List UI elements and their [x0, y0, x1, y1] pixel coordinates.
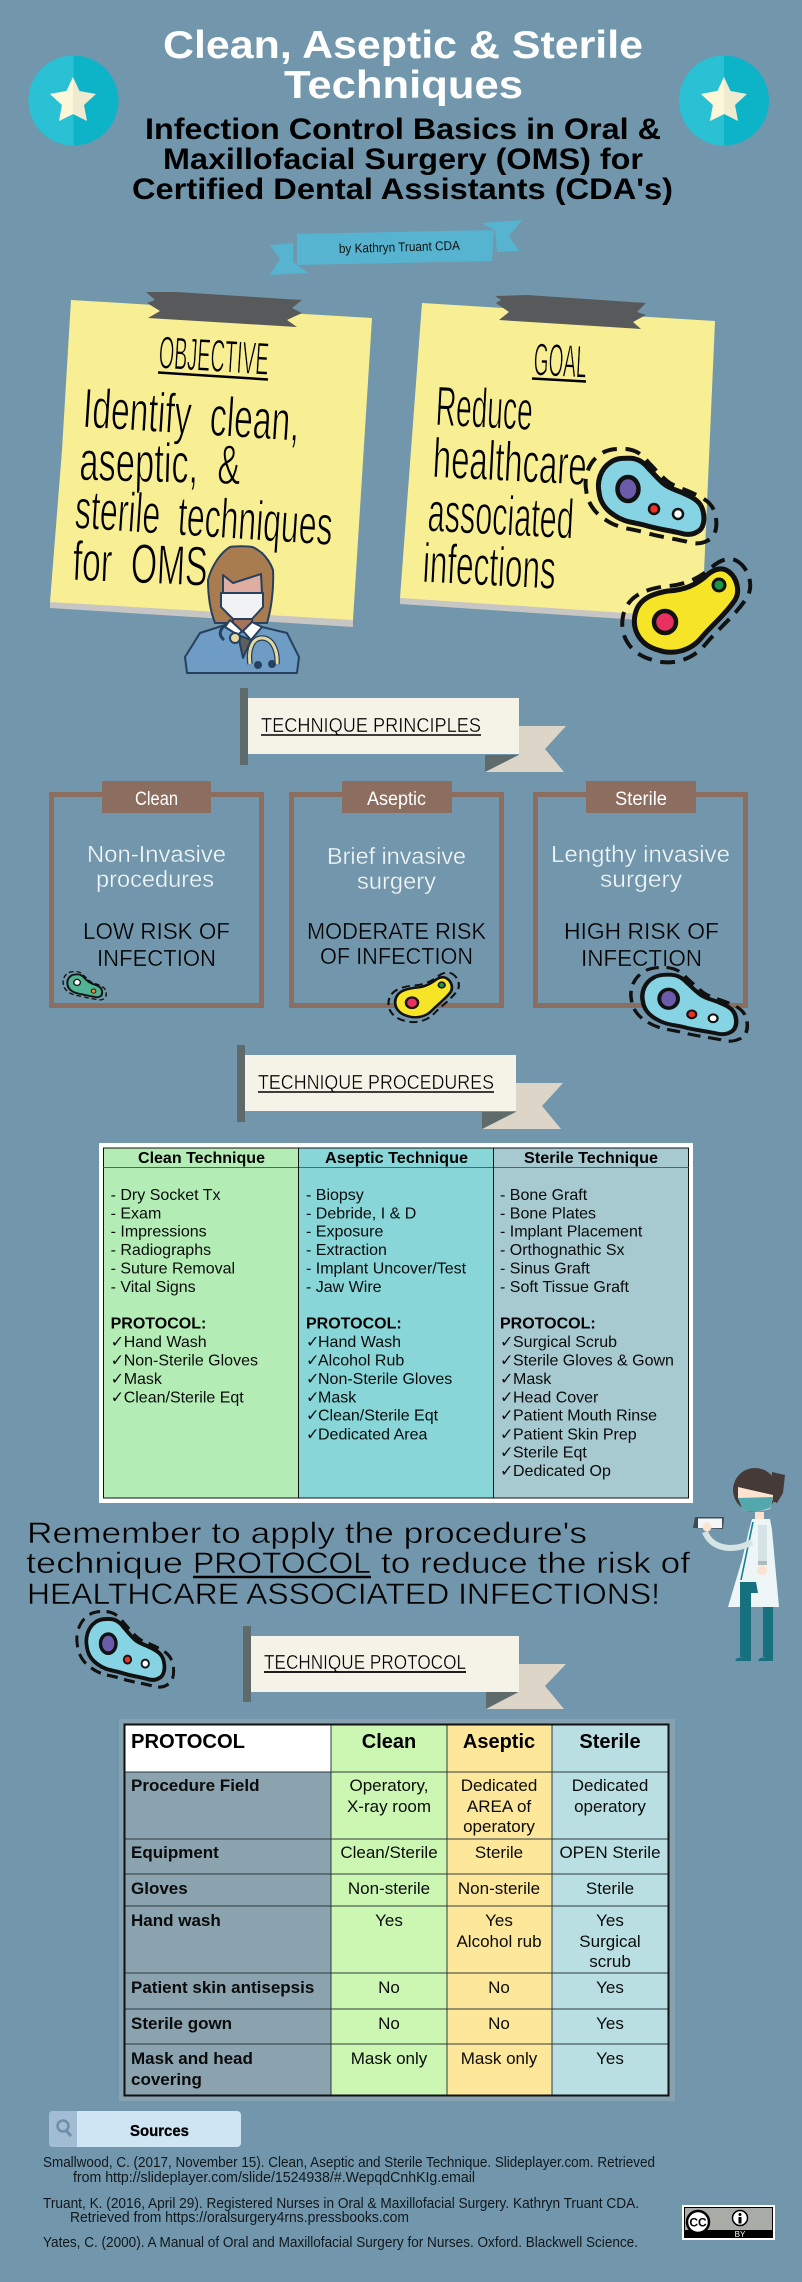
- column: aseptic technique: Alcohol Rub: [318, 1353, 404, 1370]
- panel: goal note: [400, 295, 715, 620]
- heading: goal: [532, 333, 588, 388]
- banner: technique protocol: TECHNIQUE PROTOCOL: [264, 1652, 466, 1674]
- banner: technique procedures: [237, 1045, 563, 1129]
- icon: reminder blue germ: [77, 1611, 174, 1687]
- aseptic column: Yes: [485, 1911, 513, 1930]
- column: sterile technique: - Bone Plates: [500, 1205, 596, 1222]
- reminder text: PROTOCOL: [193, 1547, 371, 1580]
- sterile description: [551, 841, 730, 892]
- sterile description: Lengthy invasive: [551, 841, 730, 867]
- column: clean technique: Mask: [124, 1371, 163, 1388]
- label: clean: Clean: [135, 789, 178, 810]
- clean column: Mask only: [351, 2049, 428, 2068]
- column: sterile technique: ✓: [500, 1332, 513, 1351]
- clean column: Yes: [375, 1911, 403, 1930]
- source references: [43, 2155, 655, 2251]
- column: sterile technique: [500, 1150, 674, 1480]
- reminder text: [26, 1517, 691, 1611]
- row labels: Hand wash: [131, 1911, 221, 1930]
- column: sterile technique: Surgical Scrub: [513, 1334, 617, 1351]
- panel: goal note: GOAL: [532, 333, 588, 388]
- column: aseptic technique: Clean/Sterile Eqt: [318, 1408, 439, 1425]
- table header: Sterile: [579, 1731, 641, 1753]
- column: aseptic technique: Mask: [318, 1389, 357, 1406]
- clean description: procedures: [96, 866, 214, 892]
- column: clean technique: Clean Technique: [138, 1150, 265, 1167]
- icon: small yellow germ: [388, 973, 459, 1022]
- aseptic column: Sterile: [475, 1843, 523, 1862]
- aseptic column: operatory: [463, 1817, 535, 1836]
- aseptic risk: OF INFECTION: [320, 943, 473, 969]
- column: clean technique: Non-Sterile Gloves: [124, 1353, 258, 1370]
- source references: Smallwood, C. (2017, November 15). Clean, Aseptic and Sterile Technique. Slideplayer.com. Retrieved: [43, 2155, 655, 2171]
- panel: aseptic: [292, 781, 502, 1006]
- column: clean technique: - Exam: [111, 1205, 161, 1222]
- icon: blue germ: [586, 449, 716, 543]
- aseptic risk: MODERATE RISK: [307, 918, 486, 944]
- column: sterile technique: Head Cover: [513, 1389, 599, 1406]
- column: aseptic technique: - Implant Uncover/Test: [306, 1261, 467, 1278]
- column: aseptic technique: Aseptic Technique: [325, 1150, 468, 1167]
- sterile column: Surgical: [579, 1932, 641, 1951]
- table header: [131, 1731, 641, 1753]
- objective text: Identify clean,: [81, 376, 302, 453]
- title: [163, 24, 643, 107]
- clean description: Non-Invasive: [87, 841, 226, 867]
- column: sterile technique: ✓: [500, 1461, 513, 1480]
- sterile column: operatory: [574, 1797, 646, 1816]
- column: clean technique: ✓: [111, 1332, 124, 1351]
- sterile description: surgery: [600, 866, 682, 892]
- column: clean technique: Clean/Sterile Eqt: [124, 1389, 244, 1406]
- row labels: [131, 1776, 314, 2089]
- column: aseptic technique: ✓: [306, 1424, 319, 1443]
- reminder text: to reduce the risk of: [381, 1547, 691, 1580]
- objective text: sterile techniques: [73, 477, 335, 557]
- panel: objective note: OBJECTIVE: [157, 326, 270, 385]
- table header: Clean: [362, 1731, 416, 1753]
- label: aseptic: [342, 781, 452, 813]
- row labels: covering: [131, 2070, 202, 2089]
- title: Techniques: [284, 64, 523, 107]
- column: sterile technique: ✓: [500, 1387, 513, 1406]
- sterile column: Yes: [596, 2014, 624, 2033]
- reminder text: Remember to apply the procedure's: [27, 1517, 587, 1550]
- column: aseptic technique: ✓: [306, 1369, 319, 1388]
- clean risk: INFECTION: [97, 945, 216, 971]
- icon: creative commons badge: [682, 2205, 775, 2240]
- panel: objective note: [50, 292, 372, 627]
- heading: objective: [157, 326, 270, 385]
- icon: medium blue germ: [631, 967, 747, 1041]
- goal text: Reduce: [434, 374, 535, 442]
- table header: PROTOCOL: [131, 1731, 245, 1753]
- column: sterile technique: Sterile Gloves & Gown: [513, 1353, 674, 1370]
- source references: Truant, K. (2016, April 29). Registered Nurses in Oral & Maxillofacial Surgery. Kathryn Truant CDA.: [43, 2196, 639, 2212]
- aseptic description: [327, 843, 466, 894]
- goal text: infections: [421, 531, 557, 601]
- sterile column: Sterile: [586, 1879, 634, 1898]
- column: aseptic technique: ✓: [306, 1332, 319, 1351]
- table: technique protocol: [119, 1719, 675, 2101]
- source references: Retrieved from https://oralsurgery4rns.pressbooks.com: [70, 2210, 409, 2226]
- column: aseptic technique: Dedicated Area: [318, 1426, 428, 1443]
- sterile risk: HIGH RISK OF: [564, 918, 719, 944]
- subtitle: Certified Dental Assistants (CDA's): [132, 173, 673, 206]
- column: aseptic technique: PROTOCOL:: [306, 1316, 402, 1333]
- column: clean technique: ✓: [111, 1369, 124, 1388]
- clean risk: [83, 918, 230, 971]
- source references: Yates, C. (2000). A Manual of Oral and Maxillofacial Surgery for Nurses. Oxford. Blackwell Science.: [43, 2235, 638, 2251]
- column: aseptic technique: - Exposure: [306, 1224, 383, 1241]
- tape: [146, 292, 302, 327]
- row labels: Procedure Field: [131, 1776, 259, 1795]
- column: sterile technique: ✓: [500, 1443, 513, 1462]
- icon: left star badge: [28, 56, 118, 146]
- tape: [495, 295, 646, 329]
- column: clean technique: [111, 1150, 265, 1406]
- banner: technique procedures: TECHNIQUE PROCEDURES: [258, 1072, 494, 1094]
- column: sterile technique: - Sinus Graft: [500, 1261, 590, 1278]
- sources search button: [49, 2111, 241, 2147]
- objective text: for OMS: [71, 529, 209, 598]
- sterile column: Dedicated: [572, 1776, 648, 1795]
- sterile column: Yes: [596, 1978, 624, 1997]
- banner: technique principles: TECHNIQUE PRINCIPLES: [261, 715, 481, 737]
- column: clean technique: ✓: [111, 1387, 124, 1406]
- aseptic column: No: [488, 1978, 510, 1997]
- panel: clean: [52, 781, 262, 1006]
- banner: technique principles: [240, 688, 566, 772]
- clean column: No: [378, 2014, 400, 2033]
- author ribbon: [270, 220, 522, 275]
- row labels: Sterile gown: [131, 2014, 232, 2033]
- aseptic column: Mask only: [461, 2049, 538, 2068]
- column: sterile technique: - Soft Tissue Graft: [500, 1279, 629, 1296]
- panel: sterile: [536, 781, 746, 1006]
- column: sterile technique: Sterile Technique: [524, 1150, 658, 1167]
- clean column: No: [378, 1978, 400, 1997]
- column: sterile technique: Mask: [513, 1371, 552, 1388]
- icon: creative commons badge: CC: [689, 2216, 707, 2230]
- column: clean technique: PROTOCOL:: [111, 1316, 206, 1333]
- sterile risk: [564, 918, 719, 971]
- label: sterile: [586, 781, 696, 813]
- column: aseptic technique: - Extraction: [306, 1242, 387, 1259]
- row labels: Equipment: [131, 1843, 219, 1862]
- column: aseptic technique: ✓: [306, 1351, 319, 1370]
- title: Clean, Aseptic & Sterile: [163, 24, 643, 67]
- row labels: Mask and head: [131, 2049, 253, 2068]
- row labels: Gloves: [131, 1879, 188, 1898]
- label: aseptic: Aseptic: [367, 789, 426, 810]
- column: sterile technique: PROTOCOL:: [500, 1316, 596, 1333]
- column: sterile technique: - Implant Placement: [500, 1224, 643, 1241]
- column: aseptic technique: Non-Sterile Gloves: [318, 1371, 452, 1388]
- goal text: healthcare: [431, 426, 588, 497]
- aseptic description: surgery: [357, 868, 436, 894]
- icon: right star badge: [679, 56, 769, 146]
- column: sterile technique: Dedicated Op: [513, 1463, 611, 1480]
- sterile column: OPEN Sterile: [559, 1843, 661, 1862]
- column: clean technique: - Vital Signs: [111, 1279, 196, 1296]
- icon: yellow germ: [622, 559, 750, 662]
- subtitle: Infection Control Basics in Oral &: [145, 113, 661, 146]
- column: aseptic technique: - Jaw Wire: [306, 1279, 382, 1296]
- aseptic description: Brief invasive: [327, 843, 466, 869]
- objective text: aseptic, &: [79, 429, 241, 496]
- column: aseptic technique: - Debride, I & D: [306, 1205, 416, 1222]
- sterile risk: INFECTION: [581, 945, 702, 971]
- clean column: Clean/Sterile: [340, 1843, 438, 1862]
- aseptic column: Dedicated: [461, 1776, 537, 1795]
- clean column: X-ray room: [347, 1797, 431, 1816]
- icon: doctor with surgical mask: [185, 546, 299, 673]
- author ribbon: by Kathryn Truant CDA: [339, 238, 460, 256]
- icon: small green germ: [63, 972, 106, 1000]
- sources search button: Sources: [130, 2123, 189, 2140]
- clean risk: LOW RISK OF: [83, 918, 230, 944]
- source references: from http://slideplayer.com/slide/1524938/#.WepqdCnhKIg.email: [73, 2170, 475, 2186]
- icon: creative commons badge: BY: [735, 2230, 746, 2239]
- column: sterile technique: Patient Skin Prep: [513, 1426, 637, 1443]
- aseptic column: AREA of: [467, 1797, 531, 1816]
- aseptic column: Alcohol rub: [456, 1932, 542, 1951]
- subtitle: [132, 113, 673, 206]
- column: clean technique: - Radiographs: [111, 1242, 211, 1259]
- column: sterile technique: ✓: [500, 1406, 513, 1425]
- column: sterile technique: - Bone Graft: [500, 1187, 588, 1204]
- column: sterile technique: - Orthognathic Sx: [500, 1242, 624, 1259]
- column: aseptic technique: ✓: [306, 1387, 319, 1406]
- label: sterile: Sterile: [615, 789, 667, 810]
- column: sterile technique: Sterile Eqt: [513, 1445, 587, 1462]
- aseptic column: Non-sterile: [458, 1879, 540, 1898]
- column: clean technique: - Suture Removal: [111, 1261, 235, 1278]
- aseptic risk: [307, 918, 486, 969]
- column: clean technique: Hand Wash: [124, 1334, 207, 1351]
- label: clean: [102, 781, 211, 813]
- clean column: Operatory,: [349, 1776, 429, 1795]
- column: aseptic technique: Hand Wash: [318, 1334, 401, 1351]
- column: aseptic technique: [306, 1150, 468, 1443]
- column: clean technique: - Impressions: [111, 1224, 207, 1241]
- column: clean technique: - Dry Socket Tx: [111, 1187, 221, 1204]
- row labels: Patient skin antisepsis: [131, 1978, 314, 1997]
- subtitle: Maxillofacial Surgery (OMS) for: [163, 143, 644, 176]
- sterile column: Yes: [596, 1911, 624, 1930]
- sterile column: scrub: [589, 1952, 631, 1971]
- clean column: Non-sterile: [348, 1879, 430, 1898]
- column: clean technique: ✓: [111, 1351, 124, 1370]
- column: sterile technique: ✓: [500, 1424, 513, 1443]
- table: technique procedures: [99, 1143, 693, 1503]
- banner: technique protocol: [243, 1626, 566, 1709]
- table header: Aseptic: [463, 1731, 535, 1753]
- goal text: associated: [426, 480, 575, 551]
- column: aseptic technique: ✓: [306, 1406, 319, 1425]
- reminder text: technique: [26, 1547, 183, 1580]
- aseptic column: No: [488, 2014, 510, 2033]
- icon: dentist with clipboard: [693, 1468, 785, 1661]
- objective text: [71, 376, 335, 598]
- column: sterile technique: ✓: [500, 1369, 513, 1388]
- aseptic column: [456, 1776, 542, 2068]
- reminder text: HEALTHCARE ASSOCIATED INFECTIONS!: [27, 1578, 660, 1611]
- sterile column: [559, 1776, 661, 2068]
- sterile column: Yes: [596, 2049, 624, 2068]
- column: sterile technique: Patient Mouth Rinse: [513, 1408, 657, 1425]
- goal text: [421, 374, 588, 601]
- column: aseptic technique: - Biopsy: [306, 1187, 364, 1204]
- clean description: [87, 841, 226, 892]
- clean column: [340, 1776, 438, 2068]
- column: sterile technique: ✓: [500, 1351, 513, 1370]
